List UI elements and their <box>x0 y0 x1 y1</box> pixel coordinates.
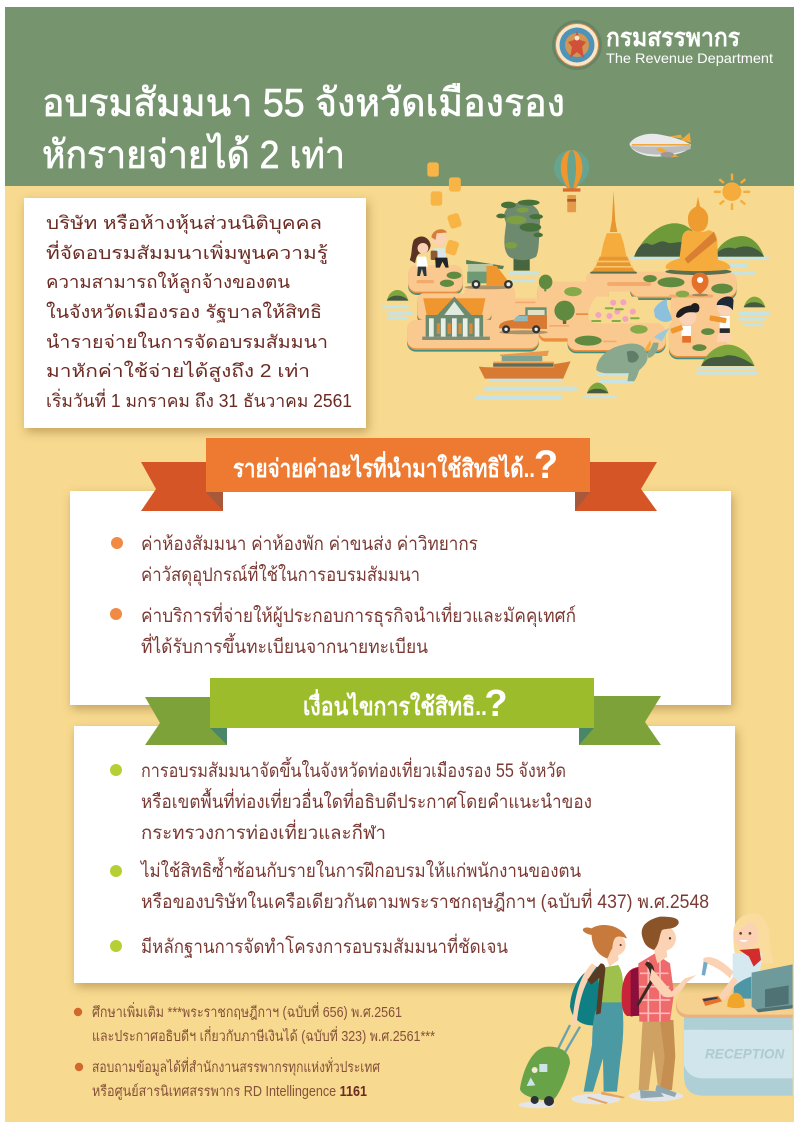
panel: intro text: ความสามารถให้ลูกจ้างของตน <box>46 271 290 293</box>
icon: bushes and trees <box>440 272 733 351</box>
title <box>42 82 565 177</box>
icon: seated Buddha <box>665 197 732 275</box>
icon: map pin <box>692 273 709 296</box>
icon: long boat <box>479 351 571 379</box>
icon: hills <box>387 223 765 393</box>
bullet list: conditions: ไม่ใช้สิทธิซ้ำซ้อนกับรายในการฝึกอบรมให้แก่พนักงานของตน <box>139 857 581 882</box>
bullet list: expenses: ค่าห้องสัมมนา ค่าห้องพัก ค่าขนส่ง ค่าวิทยากร <box>141 534 478 555</box>
traveller: woman with suitcase <box>519 925 627 1108</box>
footer notes: สอบถามข้อมูลได้ที่สำนักงานสรรพากรทุกแห่งทั่วประเทศ <box>92 1057 381 1076</box>
bullet list: conditions: หรือเขตพื้นที่ท่องเที่ยวอื่นใดที่อธิบดีประกาศโดยคำแนะนำของ <box>141 788 592 813</box>
ribbon heading: eligible expenses: ? <box>534 443 558 487</box>
title: หักรายจ่ายได้ 2 เท่า <box>42 133 345 177</box>
icon: hot air balloon <box>554 150 589 212</box>
reception desk: RECEPTION <box>705 1045 785 1061</box>
bullet list: conditions <box>110 757 709 958</box>
ribbon heading: eligible expenses: รายจ่ายค่าอะไรที่นำมาใช้สิทธิได้.. <box>233 451 535 483</box>
icon: songkran children <box>670 296 734 343</box>
panel: intro text: เริ่มวันที่ 1 มกราคม ถึง 31 ธันวาคม 2561 <box>46 388 352 411</box>
icon: tuk tuk <box>464 260 513 289</box>
title: อบรมสัมมนา 55 จังหวัดเมืองรอง <box>42 82 565 125</box>
icon: sun <box>714 174 750 210</box>
illustration: Thailand tourism map <box>382 133 770 399</box>
bullet list: expenses: ค่าวัสดุอุปกรณ์ที่ใช้ในการอบรมสัมมนา <box>141 561 420 587</box>
icon: airplane <box>629 133 691 157</box>
ribbon heading: conditions: ? <box>484 683 508 725</box>
panel: intro text: บริษัท หรือห้างหุ้นส่วนนิติบุคคล <box>46 213 322 234</box>
bullet list: expenses <box>110 534 576 658</box>
map land blocks <box>407 265 737 359</box>
icon: elephant <box>596 299 672 381</box>
icon: golden pagoda <box>590 191 637 274</box>
icon: route markers <box>427 162 462 256</box>
footer notes: หรือศูนย์สารนิเทศสรรพากร RD Intellingence 1161 <box>92 1083 367 1100</box>
footer notes <box>74 1002 435 1100</box>
logo: Revenue Department <box>552 20 773 70</box>
ribbon heading: conditions: เงื่อนไขการใช้สิทธิ.. <box>303 689 487 721</box>
panel: intro text: นำรายจ่ายในการจัดอบรมสัมมนา <box>46 331 328 352</box>
bullet list: conditions: หรือของบริษัทในเครือเดียวกันตามพระราชกฤษฎีกาฯ (ฉบับที่ 437) พ.ศ.2548 <box>141 888 709 913</box>
panel: intro text: มาหักค่าใช้จ่ายได้สูงถึง 2 เท่า <box>46 360 310 382</box>
footer notes: ศึกษาเพิ่มเติม ***พระราชกฤษฎีกาฯ (ฉบับที่ 656) พ.ศ.2561 <box>92 1002 402 1021</box>
panel: intro text: ในจังหวัดเมืองรอง รัฐบาลให้สิทธิ <box>46 301 322 323</box>
icon: tourist couple <box>410 229 449 276</box>
receptionist <box>703 913 774 1000</box>
logo: Revenue Department: กรมสรรพากร <box>606 24 741 52</box>
ribbon heading: conditions <box>145 678 661 745</box>
water strips <box>382 257 770 399</box>
logo: Revenue Department: The Revenue Department <box>606 50 773 66</box>
traveller: man with backpack <box>622 917 696 1101</box>
panel: intro text <box>24 198 366 428</box>
reception desk <box>676 993 793 1096</box>
icon: Thai temple <box>422 297 490 340</box>
header band <box>5 7 794 186</box>
icon: limestone rock <box>496 200 543 271</box>
bullet list: expenses: ที่ได้รับการขึ้นทะเบียนจากนายทะเบียน <box>141 633 428 658</box>
ribbon heading: eligible expenses <box>141 438 657 511</box>
bullet list: conditions: การอบรมสัมมนาจัดขึ้นในจังหวัดท่องเที่ยวเมืองรอง 55 จังหวัด <box>141 757 566 782</box>
footer notes: และประกาศอธิบดีฯ เกี่ยวกับภาษีเงินได้ (ฉบับที่ 323) พ.ศ.2561*** <box>92 1026 435 1045</box>
icon: pickup truck <box>499 307 548 334</box>
panel: conditions <box>74 726 735 983</box>
bullet list: expenses: ค่าบริการที่จ่ายให้ผู้ประกอบการธุรกิจนำเที่ยวและมัคคุเทศก์ <box>141 602 576 628</box>
panel: eligible expenses <box>70 491 731 705</box>
illustration: hotel reception <box>519 913 793 1108</box>
lotus pond <box>588 297 642 323</box>
panel: intro text: ที่จัดอบรมสัมมนาเพิ่มพูนความรู้ <box>46 240 328 264</box>
bullet list: conditions: มีหลักฐานการจัดทำโครงการอบรมสัมมนาที่ชัดเจน <box>141 933 508 958</box>
monitor, bell, card and keys <box>702 962 793 1012</box>
bullet list: conditions: กระทรวงการท่องเที่ยวและกีฬา <box>141 819 386 844</box>
